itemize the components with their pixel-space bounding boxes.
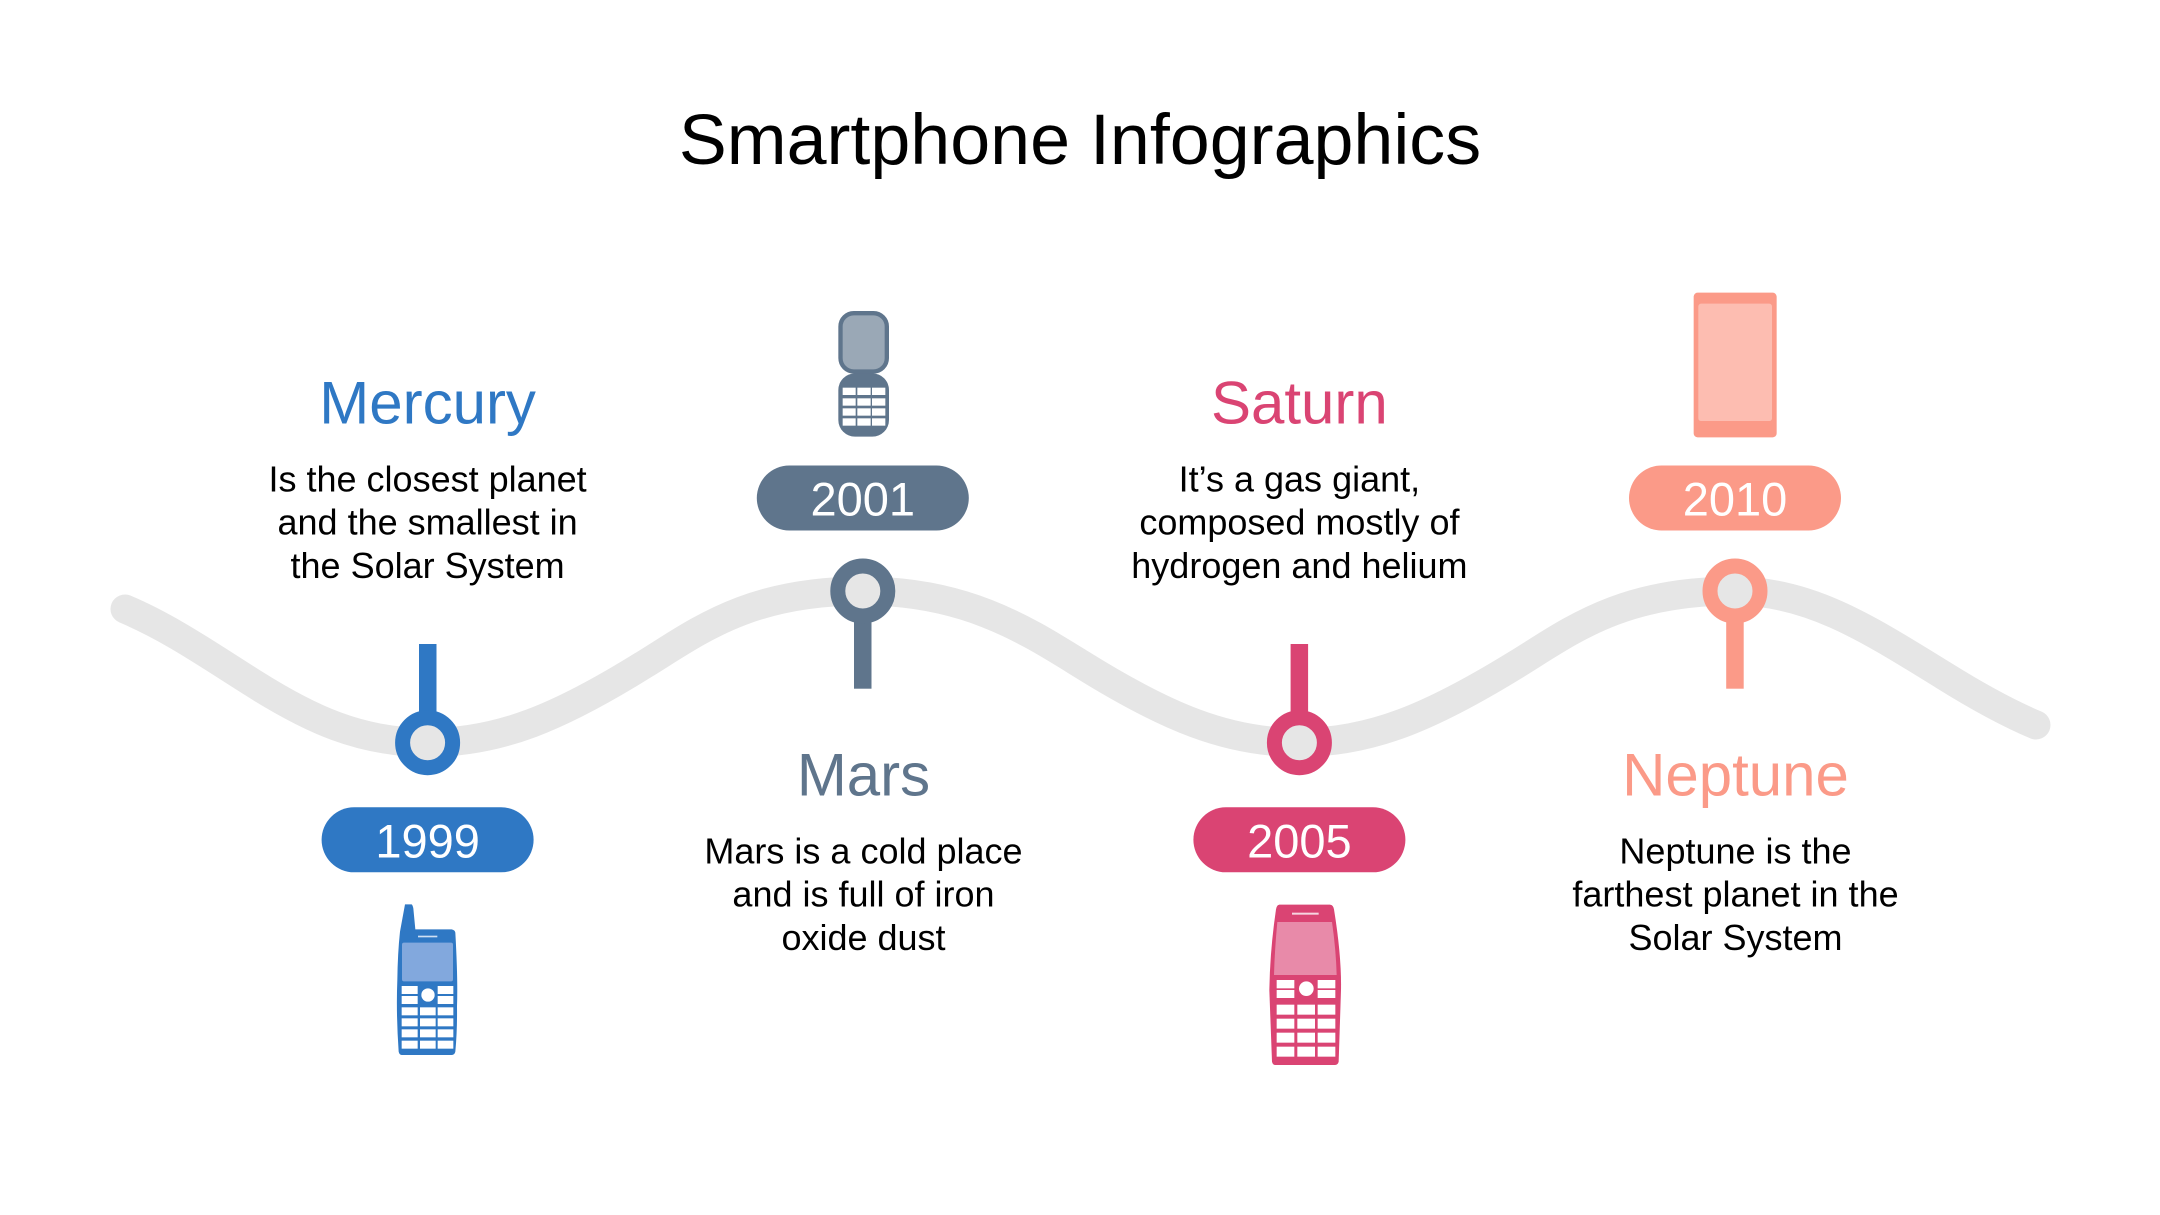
- text: Saturn description: composed mostly of: [1139, 502, 1460, 542]
- icon: candybar phone with antenna: [397, 904, 457, 1055]
- icon: smartphone: [1694, 293, 1777, 437]
- panel: Neptune 2010: [1572, 293, 1899, 958]
- heading: Saturn: Saturn: [1211, 370, 1388, 437]
- panel: Mars 2001: [704, 313, 1023, 958]
- timeline curve: [125, 591, 2036, 742]
- marker: 2005 pin: [1274, 644, 1324, 768]
- year pill: 2005: [1193, 807, 1405, 872]
- text: Mercury description: the Solar System: [291, 545, 565, 586]
- year pill: 1999: 1999: [375, 814, 480, 868]
- year pill: 2010: [1629, 466, 1841, 530]
- year pill: 2001: [757, 466, 969, 530]
- text: Mercury description: Is the closest planet: [269, 458, 587, 500]
- heading: Mercury: Mercury: [319, 370, 536, 437]
- year pill: 2010: 2010: [1683, 472, 1787, 526]
- marker: 2010 pin: [1710, 566, 1760, 689]
- text: Neptune description: Solar System: [1628, 917, 1843, 958]
- marker: 1999 pin: [403, 644, 453, 768]
- text: Saturn description: It’s a gas giant,: [1179, 458, 1420, 500]
- text: Mars description: Mars is a cold place: [704, 830, 1023, 872]
- text: Neptune description: farthest planet in the: [1572, 874, 1899, 914]
- heading: Neptune: Neptune: [1622, 741, 1849, 808]
- year pill: 2005: 2005: [1247, 814, 1352, 868]
- icon: candybar phone: [1269, 905, 1341, 1065]
- year pill: 1999: [322, 807, 534, 872]
- heading: Mars: Mars: [797, 741, 930, 808]
- title: Smartphone Infographics: [679, 100, 1481, 180]
- text: Mars description: and is full of iron: [732, 874, 995, 914]
- text: Neptune description: Neptune is the: [1619, 830, 1852, 872]
- icon: flip phone: [838, 313, 889, 437]
- text: Saturn description: hydrogen and helium: [1131, 545, 1468, 586]
- text: Mercury description: and the smallest in: [278, 502, 578, 542]
- marker: 2001 pin: [838, 566, 888, 689]
- panel: Mercury 1999: [269, 370, 587, 1055]
- year pill: 2001: 2001: [811, 472, 915, 526]
- panel: Saturn 2005: [1131, 370, 1468, 1065]
- text: Mars description: oxide dust: [781, 917, 946, 958]
